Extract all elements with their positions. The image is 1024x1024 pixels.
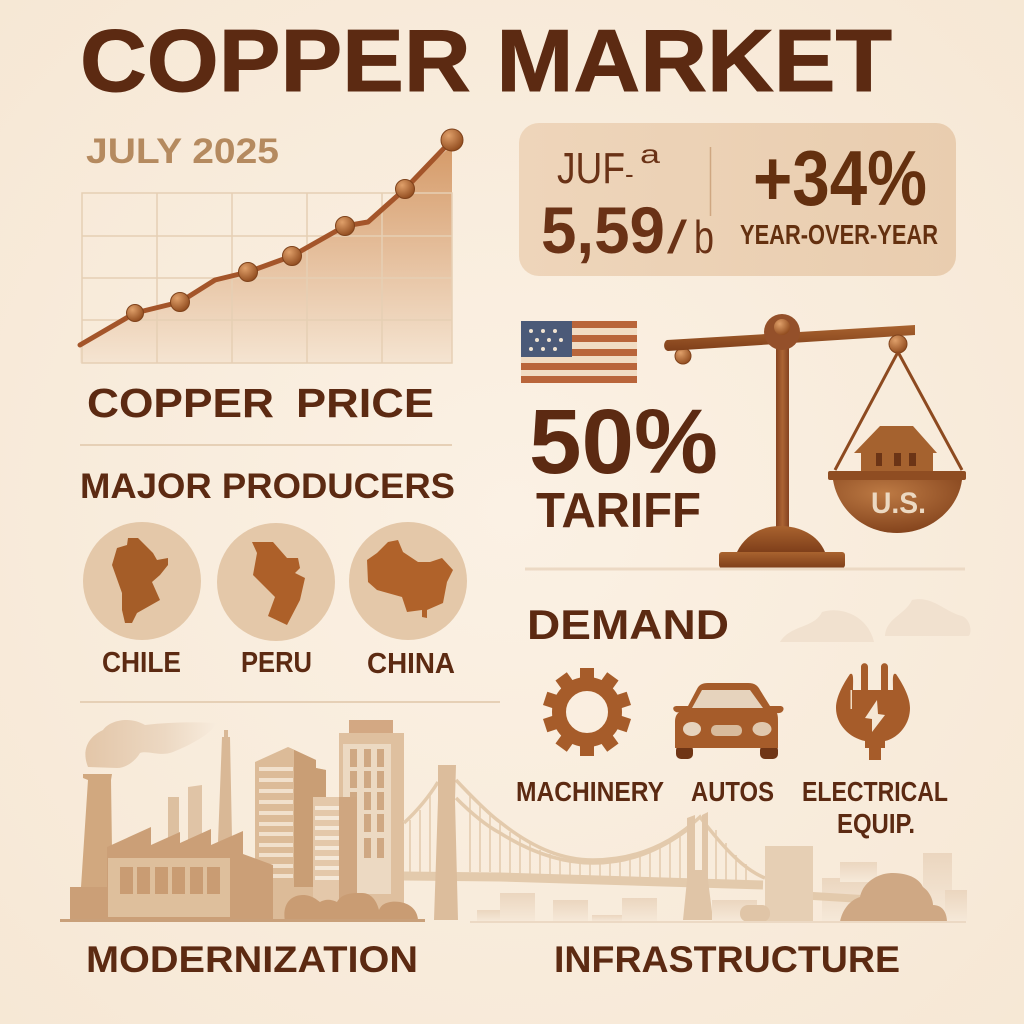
producer: China: CHINA xyxy=(367,648,455,680)
hanging pan xyxy=(828,335,966,533)
demand: electrical equipment: ELECTRICAL xyxy=(802,776,948,807)
demand: autos xyxy=(673,683,784,807)
smoke xyxy=(85,720,217,768)
price stat: / xyxy=(667,211,687,263)
chart title: PRICE xyxy=(296,380,434,426)
producer: Peru xyxy=(217,523,335,679)
price stat: b xyxy=(694,211,714,263)
factory xyxy=(70,827,273,920)
far building xyxy=(255,747,357,920)
demand: machinery xyxy=(516,668,664,807)
factory chimneys xyxy=(81,774,112,887)
price stat: 5,59 xyxy=(541,193,665,267)
change label: YEAR-OVER-YEAR xyxy=(740,219,938,250)
hanging pan: U.S. xyxy=(871,487,926,520)
label: modernization: MODERNIZATION xyxy=(86,939,418,980)
line chart: copper price xyxy=(80,129,463,363)
chart area fill xyxy=(80,145,452,363)
icon: car xyxy=(673,683,784,759)
icon: US flag xyxy=(521,321,637,383)
icon: balance scale xyxy=(664,314,966,568)
chart title: COPPER xyxy=(87,380,274,426)
bridge xyxy=(404,766,765,920)
illustration: city skyline and bridge xyxy=(60,720,967,923)
date stat: - xyxy=(625,159,634,189)
date stat: JUF xyxy=(557,144,625,193)
tariff value: 50% xyxy=(529,391,718,493)
title: COPPER MARKET xyxy=(80,11,892,110)
date stat: a xyxy=(640,139,661,169)
demand: autos: AUTOS xyxy=(691,776,774,807)
date label: JULY 2025 xyxy=(86,132,279,171)
demand: electrical equipment: EQUIP. xyxy=(837,808,915,839)
icon: gear xyxy=(543,668,631,756)
price line xyxy=(80,140,452,345)
heading: major producers: MAJOR PRODUCERS xyxy=(80,467,455,506)
label: infrastructure: INFRASTRUCTURE xyxy=(554,939,900,980)
producer: Chile: CHILE xyxy=(102,647,181,679)
decorative clouds xyxy=(780,599,970,642)
far city xyxy=(477,853,967,922)
change stat: +34% xyxy=(753,134,927,222)
shrubs xyxy=(284,893,418,921)
stat panel xyxy=(519,123,956,276)
tariff label: TARIFF xyxy=(536,484,701,538)
icon: plug xyxy=(836,663,910,760)
data points xyxy=(126,129,463,322)
demand: machinery: MACHINERY xyxy=(516,776,664,807)
heading: demand: DEMAND xyxy=(527,601,729,648)
producer: Peru: PERU xyxy=(241,647,312,679)
producer: Chile xyxy=(83,522,201,679)
producer: China xyxy=(349,522,467,680)
demand: electrical equipment xyxy=(802,663,948,839)
